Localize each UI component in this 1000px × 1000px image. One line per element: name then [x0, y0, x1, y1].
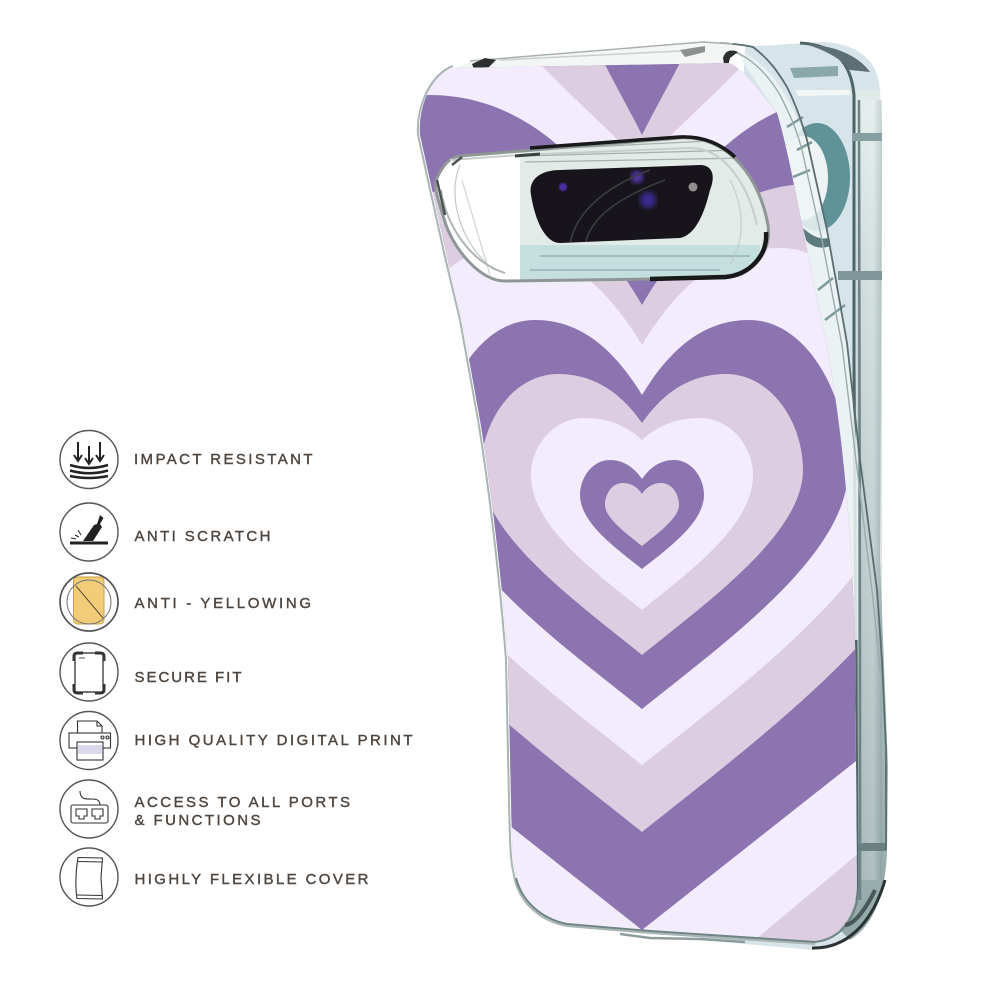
feature list: [60, 430, 412, 906]
label: secure fit: SECURE FIT: [134, 669, 242, 686]
feature: access to all ports and functions: [60, 780, 350, 838]
camera cut-out: [430, 130, 780, 285]
icon: printer: [60, 712, 118, 770]
icon: yellow case crossed out: [60, 573, 118, 631]
icon: impact arrows: [60, 430, 118, 488]
label: access to all ports and functions: & FUNCTIONS: [134, 812, 260, 829]
label: access to all ports and functions: ACCESS TO ALL PORTS: [134, 794, 350, 811]
printed heart pattern: [420, 63, 857, 941]
icon: ports: [60, 780, 118, 838]
phone case product: [416, 41, 888, 950]
case outline rim: [418, 66, 885, 948]
feature: anti scratch: [60, 503, 270, 561]
icon: phone with bumper corners: [60, 643, 118, 701]
feature: high quality digital print: [60, 712, 412, 770]
label: access to all ports and functions: [134, 794, 350, 829]
icon: flexible cover: [60, 848, 118, 906]
label: anti scratch: ANTI SCRATCH: [134, 528, 270, 545]
infographic: phone case features: [59, 41, 888, 950]
clear case side edge: [720, 43, 886, 850]
case top rim: [453, 42, 740, 69]
feature: secure fit: [60, 643, 242, 701]
feature: impact resistant: [60, 430, 312, 488]
camera frame: [435, 137, 768, 281]
feature: highly flexible cover: [60, 848, 369, 906]
icon: blade scratching surface: [60, 503, 118, 561]
label: high quality digital print: HIGH QUALITY DIGITAL PRINT: [134, 732, 412, 749]
label: anti yellowing: ANTI - YELLOWING: [134, 595, 311, 612]
label: impact resistant: IMPACT RESISTANT: [134, 451, 312, 468]
phone body behind the clear case: [700, 42, 888, 950]
camera lens: [531, 165, 713, 245]
feature: anti yellowing: [60, 573, 311, 631]
label: highly flexible cover: HIGHLY FLEXIBLE COVER: [134, 871, 369, 888]
